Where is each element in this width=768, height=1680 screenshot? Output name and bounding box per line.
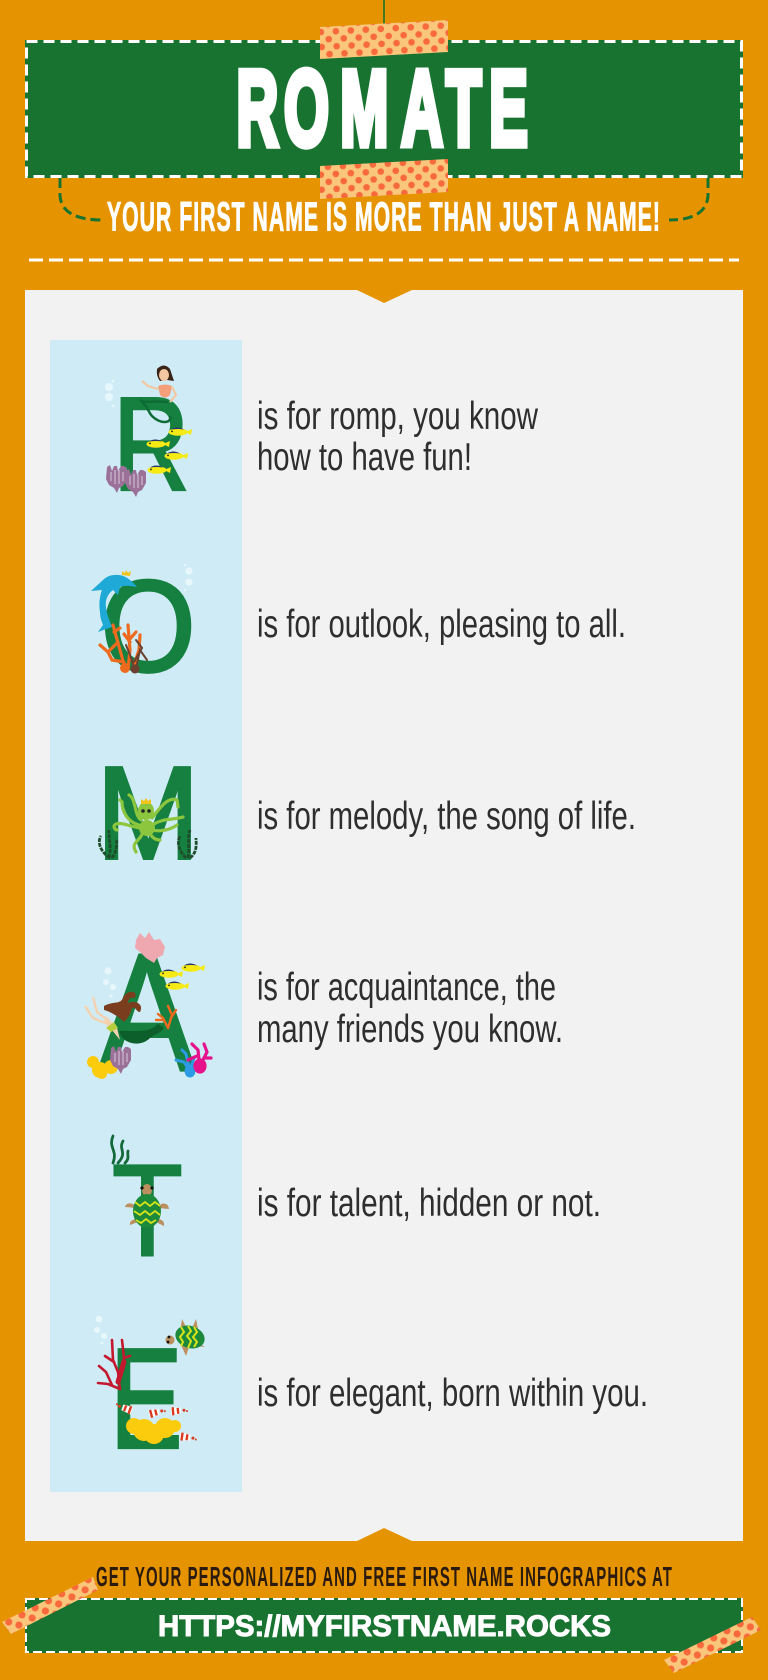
turtle <box>166 1319 208 1356</box>
tape: footer left <box>2 1577 98 1634</box>
fish <box>160 964 205 990</box>
letter T: T <box>112 1138 183 1284</box>
yellow coral <box>126 1418 181 1444</box>
text: A: many friends you know. <box>257 1008 563 1051</box>
letter M: M <box>96 740 200 887</box>
text: R: is for romp, you know <box>257 395 539 438</box>
letter E: E <box>110 1319 182 1478</box>
seaweed <box>112 1136 128 1163</box>
text: T: is for talent, hidden or not. <box>257 1182 601 1225</box>
purple coral <box>110 1046 131 1074</box>
mermaid <box>85 992 164 1044</box>
crown <box>122 570 131 576</box>
letter E illustration <box>94 1316 208 1478</box>
fish <box>146 428 192 474</box>
bubbles <box>184 564 193 591</box>
title banner <box>25 40 743 178</box>
letter O: O <box>101 554 196 699</box>
divider <box>29 258 739 262</box>
octopus <box>114 795 183 852</box>
red coral <box>98 1340 130 1389</box>
letter T illustration <box>112 1136 183 1284</box>
title: ROMATE <box>237 49 528 169</box>
text: A: is for acquaintance, the <box>257 966 556 1009</box>
turtle <box>125 1184 169 1228</box>
tape: footer right <box>664 1617 761 1673</box>
panel: letter column <box>50 340 242 1492</box>
letter A: A <box>98 920 195 1106</box>
text: R <box>257 395 539 479</box>
mermaid <box>105 366 176 422</box>
letter A illustration <box>85 920 211 1106</box>
text: M: is for melody, the song of life. <box>257 795 636 838</box>
connector curve: right <box>669 178 708 220</box>
hanging string <box>383 0 385 24</box>
bubbles <box>103 967 116 998</box>
text: R: how to have fun! <box>257 436 472 479</box>
tape: top <box>320 20 448 59</box>
bubbles <box>94 1316 107 1344</box>
blue coral <box>176 1050 194 1076</box>
letter M illustration <box>96 740 200 887</box>
connector curve: left <box>60 178 103 220</box>
yellow coral <box>87 1056 118 1079</box>
seaweed <box>99 830 196 858</box>
text: E: is for elegant, born within you. <box>257 1372 648 1415</box>
pink coral <box>135 932 165 963</box>
letter R: R <box>113 371 189 518</box>
coral <box>106 465 146 497</box>
text: A <box>257 966 563 1051</box>
orange coral <box>156 1006 176 1028</box>
dolphin <box>91 575 137 632</box>
coral <box>100 625 147 674</box>
letter O illustration <box>91 554 196 699</box>
magenta coral <box>188 1044 211 1072</box>
panel: main content <box>25 290 743 1541</box>
footer url: HTTPS://MYFIRSTNAME.ROCKS <box>158 1610 611 1643</box>
letter R illustration <box>105 366 192 518</box>
tape: bottom of banner <box>320 159 448 199</box>
text: O: is for outlook, pleasing to all. <box>257 603 626 646</box>
footer banner <box>25 1598 743 1653</box>
clownfish <box>114 1401 197 1443</box>
